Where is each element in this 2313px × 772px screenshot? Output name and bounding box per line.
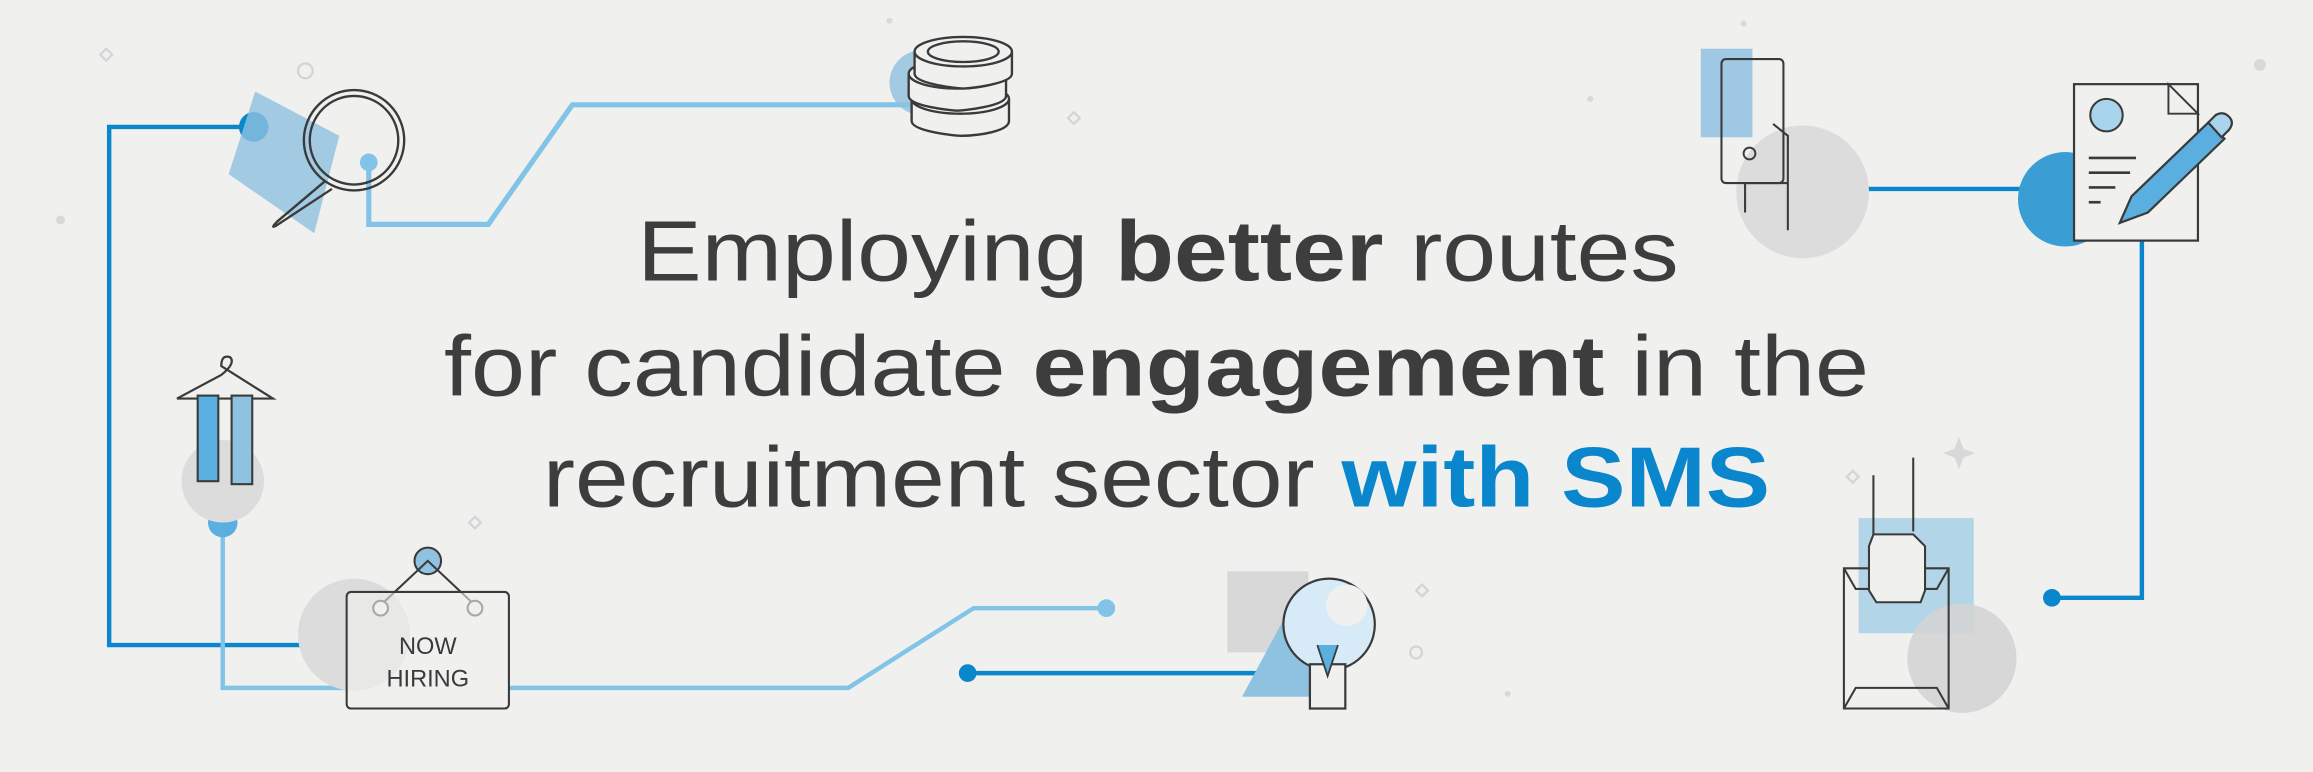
icon: tie on hanger (177, 357, 273, 523)
connector: sign to right (509, 608, 1106, 688)
icon: magnifying glass (229, 90, 404, 233)
icon: now hiring sign: HIRING (387, 666, 469, 692)
decorative sparkles (100, 49, 1859, 658)
icon: resume and pencil (2018, 84, 2232, 247)
title: Employing better routes (637, 204, 1679, 299)
title (444, 204, 1869, 525)
title: recruitment sector with SMS (543, 430, 1770, 525)
icon: light bulb (1227, 571, 1375, 709)
connector: right side (1789, 189, 2142, 598)
title: for candidate engagement in the (444, 320, 1869, 415)
connector: light blue magnifier to coins (369, 105, 922, 224)
connector: hanger to sign (223, 523, 348, 688)
icon: coins (890, 37, 1012, 136)
connector: dark blue to bulb (968, 672, 1286, 675)
icon: now hiring sign: NOW (399, 634, 457, 660)
connector dots (208, 112, 2061, 682)
connector: dark blue left loop (109, 127, 348, 645)
icon: phone in hand (1701, 49, 1869, 258)
icon: hand with envelope (1844, 458, 2016, 713)
icon: now hiring sign (298, 548, 509, 709)
